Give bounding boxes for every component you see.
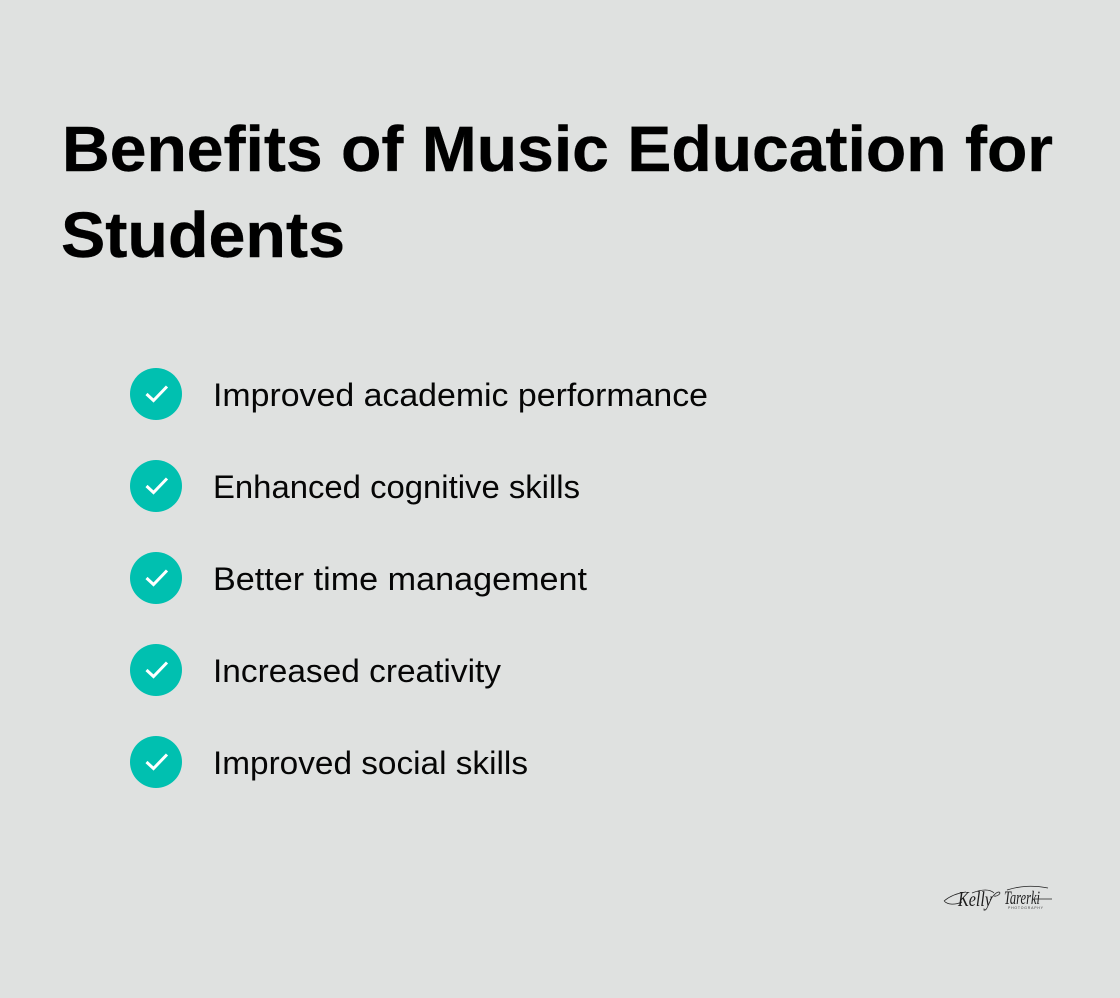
title: Benefits of Music Education for [62, 113, 1053, 185]
signature logo: Tarerki [1004, 888, 1040, 909]
list item: increased creativity [130, 644, 501, 696]
list item: better time management: Better time management [213, 561, 587, 597]
list item: improved social skills: Improved social skills [213, 745, 528, 781]
list item: enhanced cognitive skills: Enhanced cognitive skills [213, 469, 580, 505]
signature logo [944, 886, 1052, 911]
benefits checklist [130, 368, 708, 788]
signature logo: PHOTOGRAPHY [1008, 906, 1044, 910]
list item: enhanced cognitive skills [130, 460, 580, 512]
signature logo: Kelly [957, 887, 993, 911]
title [61, 113, 1053, 271]
list item: improved academic performance: Improved academic performance [213, 377, 708, 413]
list item: improved academic performance [130, 368, 708, 420]
list item: improved social skills [130, 736, 528, 788]
list item: increased creativity: Increased creativity [213, 653, 501, 689]
list item: better time management [130, 552, 587, 604]
title: Students [61, 199, 345, 271]
